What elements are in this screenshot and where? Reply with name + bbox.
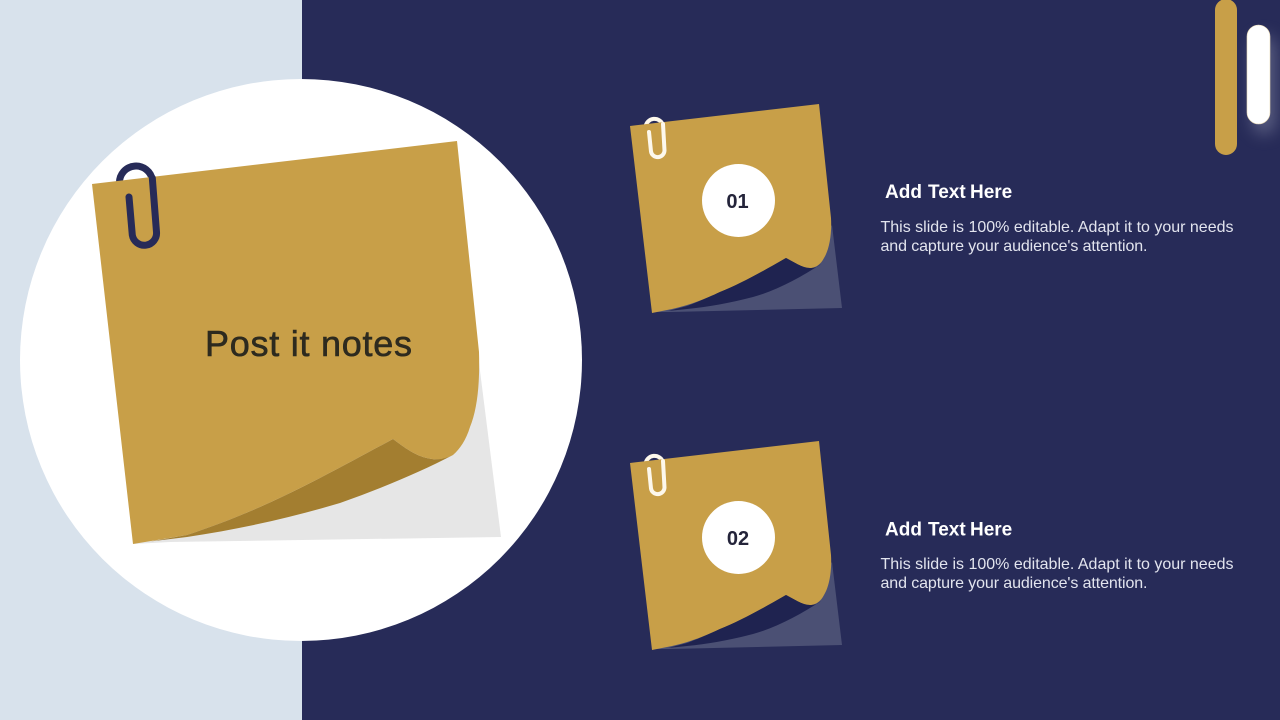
curled flap — [668, 258, 821, 311]
number badge — [702, 164, 775, 237]
heading: Here — [970, 520, 1012, 540]
number badge: 01 — [726, 191, 749, 213]
left background panel — [0, 0, 302, 720]
heading: Add — [885, 182, 922, 203]
note shadow — [652, 562, 842, 649]
heading: Text — [928, 520, 966, 540]
paperclip back — [119, 166, 152, 183]
decorative gold pill — [1215, 0, 1237, 155]
small note 01 — [630, 104, 842, 313]
note shadow — [652, 225, 842, 312]
number badge — [702, 501, 775, 574]
body copy: and capture your audience's attention. — [880, 238, 1148, 255]
text block 02 — [880, 520, 1234, 592]
white circle — [20, 79, 582, 641]
paperclip front — [649, 461, 664, 494]
paperclip front — [129, 178, 157, 245]
note body — [92, 141, 479, 544]
body copy: This slide is 100% editable. Adapt it to your needs — [880, 556, 1234, 573]
heading: Text — [928, 182, 966, 203]
decorative white pill — [1247, 25, 1276, 134]
small note 02 — [630, 441, 842, 650]
paperclip back — [646, 119, 663, 127]
body copy: This slide is 100% editable. Adapt it to your needs — [880, 219, 1234, 236]
text block 01 — [880, 182, 1234, 255]
heading: Here — [970, 182, 1012, 203]
number badge: 02 — [727, 528, 749, 550]
note title: Post it notes — [205, 323, 412, 364]
body copy: and capture your audience's attention. — [880, 575, 1148, 592]
main post-it note — [92, 141, 501, 544]
right background panel — [302, 0, 1280, 720]
note body — [630, 104, 831, 313]
curled flap — [150, 439, 453, 542]
note shadow — [133, 355, 501, 544]
paperclip front — [649, 124, 664, 157]
heading: Add — [885, 520, 922, 540]
curled flap — [668, 595, 821, 648]
paperclip back — [646, 456, 663, 464]
note body — [630, 441, 831, 650]
